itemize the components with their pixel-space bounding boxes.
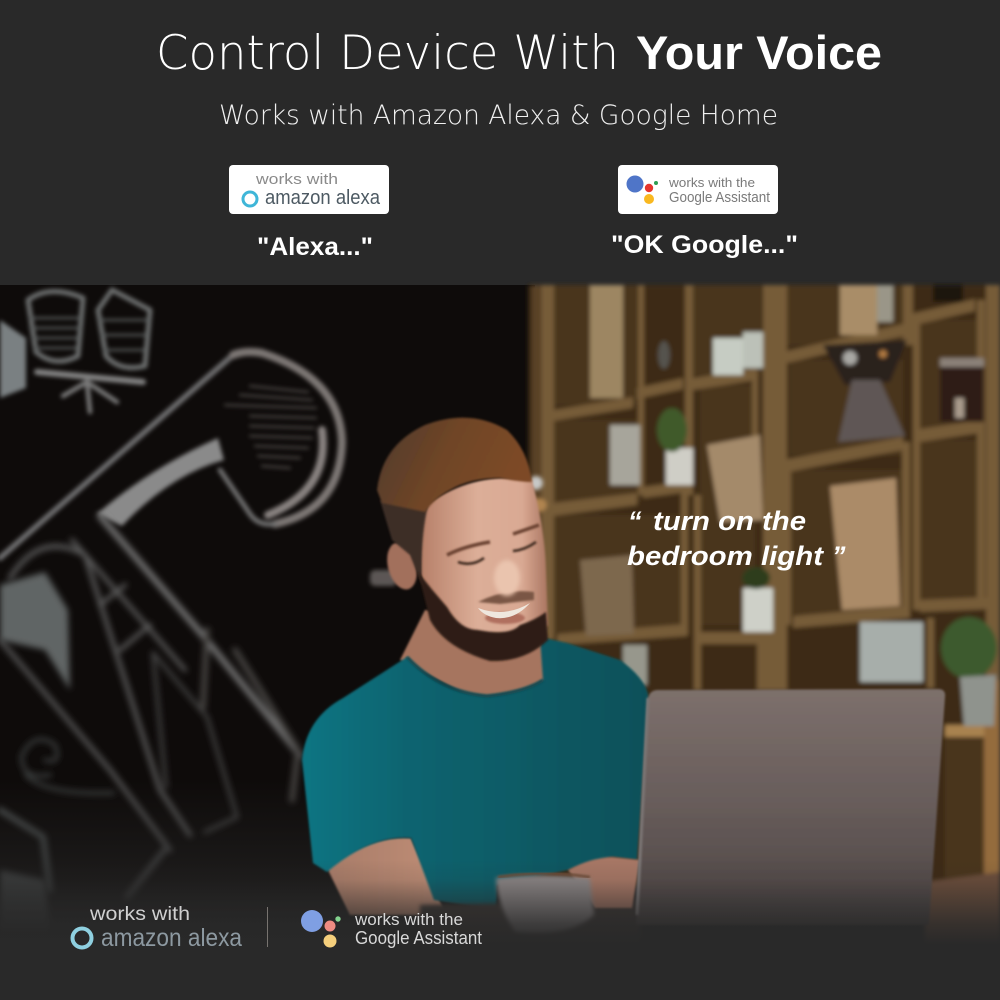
- man: mouth: [478, 603, 530, 618]
- subtitle: Works with Amazon Alexa & Google Home: [219, 100, 778, 131]
- photo: chalk drawing lower: [0, 516, 300, 897]
- man: hair: [377, 418, 532, 512]
- footer logo: works with amazon alexa: amazon alexa: [101, 924, 242, 952]
- badge: works with amazon alexa: works with: [255, 171, 338, 188]
- photo: bottom fade: [0, 860, 1000, 950]
- shelf interiors: [528, 285, 1000, 885]
- icon: alexa ring: [72, 928, 92, 948]
- man: arm: [327, 838, 446, 915]
- table left: [420, 900, 640, 950]
- man: eyes: [458, 542, 536, 564]
- laptop lit edge: [637, 698, 648, 915]
- voice command quote: ”: [832, 541, 846, 571]
- vertical posts: [532, 285, 540, 640]
- shelf items: [590, 285, 623, 398]
- icon: alexa ring: [243, 192, 257, 206]
- photo: wooden shelf wall: [528, 285, 1000, 950]
- title: [156, 26, 882, 81]
- title: Your Voice: [636, 26, 882, 79]
- right lower wood: [945, 725, 985, 737]
- label: OK Google wake word: "OK Google...": [611, 231, 798, 259]
- chalk scroll hatch: [0, 572, 70, 690]
- footer logo: works with amazon alexa: works with: [89, 904, 190, 925]
- badge: works with the Google Assistant: works with the: [668, 176, 755, 190]
- icon: google assistant dots: [301, 910, 341, 948]
- badge: works with amazon alexa: [229, 165, 389, 214]
- footer logo: works with the Google Assistant: [301, 910, 482, 948]
- photo: bulbs at shelf edge: [529, 476, 547, 512]
- photo: man at laptop in cafe: [0, 285, 1000, 1000]
- chalk wall haze: [0, 780, 535, 950]
- man: eyebrows: [447, 525, 539, 555]
- chalk smudge near head: [370, 570, 397, 586]
- voice command quote: bedroom light: [627, 541, 824, 571]
- badge: works with the Google Assistant: [618, 165, 778, 214]
- man: beard: [418, 572, 548, 661]
- label: Alexa wake word: "Alexa...": [257, 233, 373, 261]
- man: shirt collar: [407, 657, 543, 696]
- coffee cup: [496, 875, 594, 933]
- man: nose highlight: [494, 560, 520, 596]
- badge: works with amazon alexa: amazon alexa: [265, 187, 381, 209]
- footer divider: [267, 907, 268, 947]
- hand: [568, 857, 640, 908]
- laptop: [636, 689, 945, 925]
- footer logo: works with the Google Assistant: Google Assistant: [355, 927, 482, 948]
- man: moustache: [478, 591, 534, 604]
- table: [925, 872, 1000, 950]
- voice command quote: turn on the: [653, 506, 806, 536]
- photo: table and hand: [420, 689, 945, 950]
- voice command quote: [627, 506, 846, 571]
- chalk thick band: [97, 438, 224, 526]
- icon: google assistant dots: [626, 176, 658, 204]
- man: shirt: [302, 637, 649, 910]
- photo: chalk drawing upper: [0, 290, 342, 558]
- man: ear: [382, 539, 422, 593]
- chalk cups: [28, 291, 83, 361]
- voice command quote: “: [628, 506, 642, 536]
- badge: works with the Google Assistant: Google Assistant: [669, 189, 771, 206]
- cup rim: [498, 874, 590, 877]
- man: undercut: [380, 500, 428, 585]
- footer logo: works with amazon alexa: [72, 904, 242, 952]
- shelves: [553, 397, 633, 421]
- header panel background: [0, 0, 1000, 285]
- photo: dark chalkboard wall: [0, 285, 535, 1000]
- footer logo: works with the Google Assistant: works with the: [354, 911, 463, 929]
- chalk left box: [0, 320, 26, 398]
- title: Control Device With: [156, 26, 619, 81]
- photo: man: [302, 418, 649, 915]
- man: face: [420, 478, 548, 655]
- man: lower lip: [485, 612, 525, 624]
- man: neck: [400, 610, 548, 706]
- chalk arc: [0, 355, 233, 558]
